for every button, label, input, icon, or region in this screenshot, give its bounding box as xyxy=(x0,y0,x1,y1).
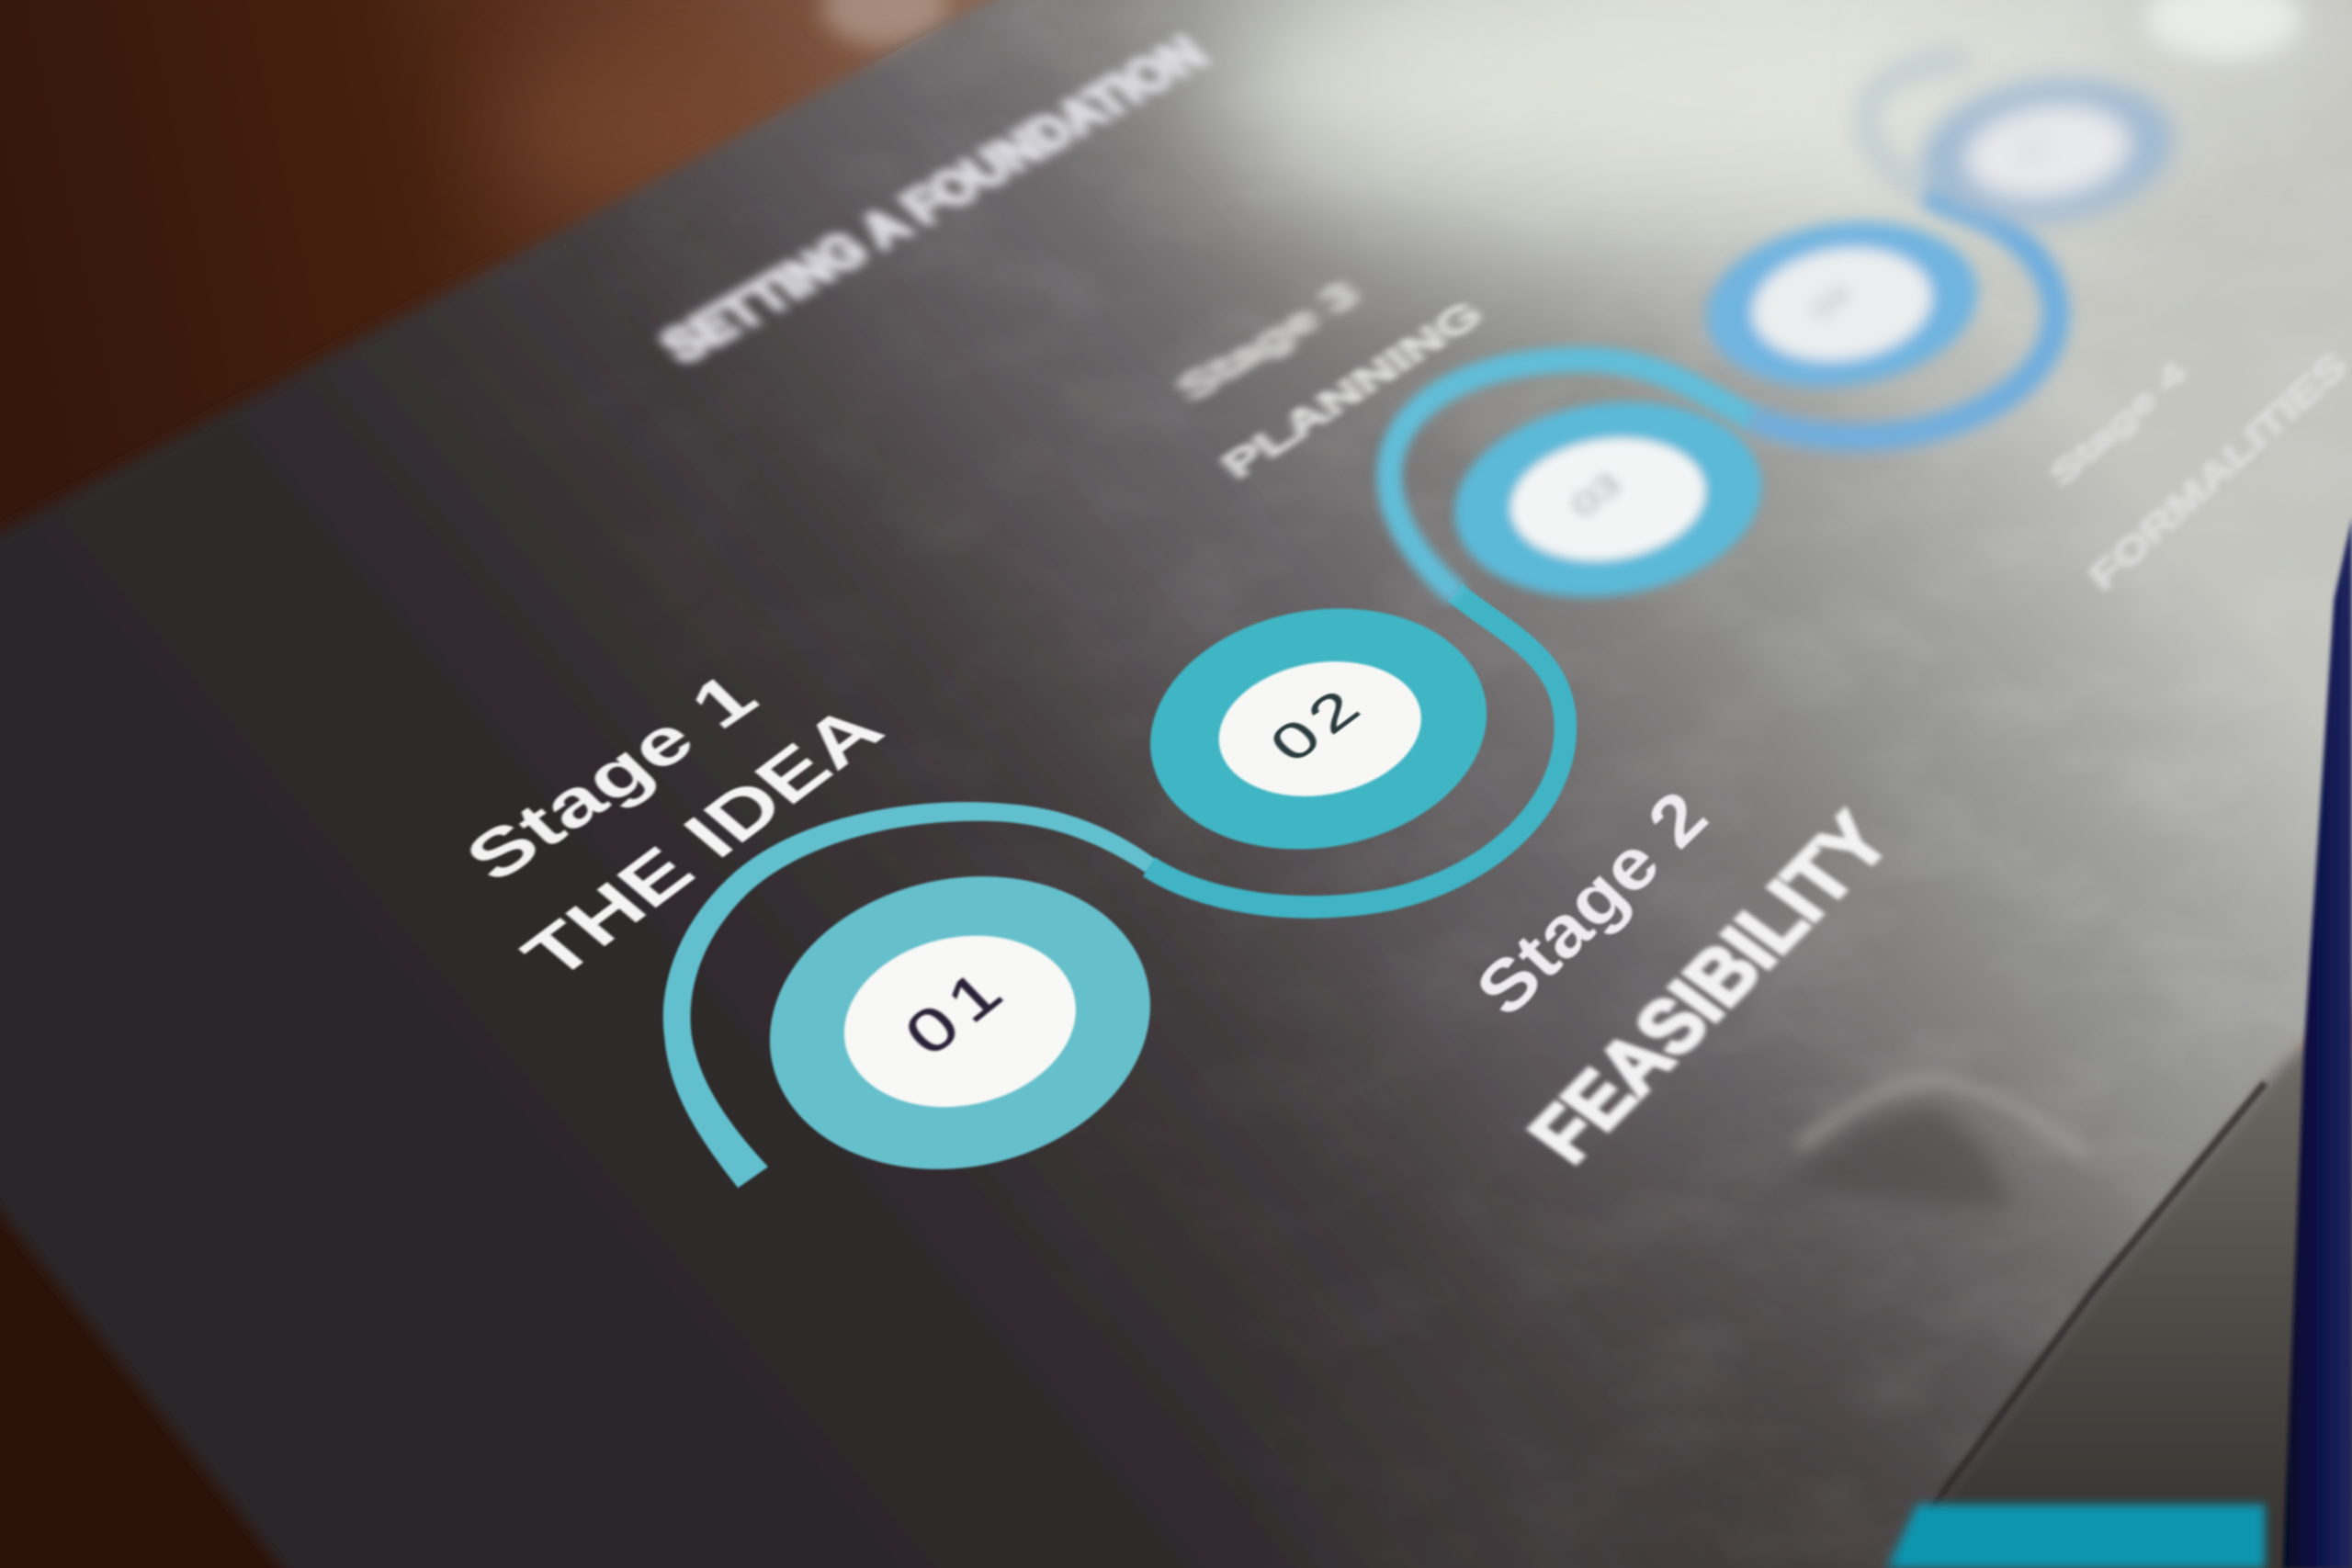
path segment: stage 5 arc xyxy=(1866,60,1965,192)
label: FORMALITIES: FORMALITIES xyxy=(2081,344,2352,598)
path segment: stage 1 tapered arc xyxy=(663,802,1158,1188)
label: FEASIBILITY: FEASIBILITY xyxy=(1511,798,1907,1178)
title: SETTING A FOUNDATION xyxy=(649,26,1218,372)
connector path xyxy=(663,60,2056,1188)
label: Stage 3: Stage 3 xyxy=(1168,275,1368,408)
under-sheet at lower right xyxy=(1845,1050,2352,1568)
path segment: stage 4 arc xyxy=(1752,192,2056,437)
label: Stage 1: Stage 1 xyxy=(449,659,773,896)
stage 02 marker xyxy=(1131,582,1506,875)
stage 02 marker: 02 xyxy=(1257,675,1377,773)
stage 01 marker: 01 xyxy=(891,953,1023,1068)
paper crease xyxy=(1785,1080,2085,1214)
stage 06 marker xyxy=(2145,0,2301,60)
teal block at bottom xyxy=(1887,1505,2265,1568)
blue pen xyxy=(2283,517,2352,1568)
path segment: stage 3 arc xyxy=(1389,360,1755,595)
stage 05 marker xyxy=(1911,64,2184,239)
stage 03 marker: 03 xyxy=(1564,467,1629,525)
stage 04 marker: 04 xyxy=(1805,279,1857,326)
label: PLANNING: PLANNING xyxy=(1213,293,1492,486)
label: Stage 4: Stage 4 xyxy=(2043,355,2193,493)
label: Stage 2: Stage 2 xyxy=(1460,776,1723,1031)
label: THE IDEA: THE IDEA xyxy=(504,690,899,993)
stage 01 marker xyxy=(742,842,1178,1203)
paper edge shadow xyxy=(1893,1083,2265,1568)
stage 04 marker xyxy=(1696,205,1988,403)
stage 05 marker: 05 xyxy=(2012,130,2055,169)
path segment: stage 2 arc xyxy=(1149,592,1566,907)
stage 03 marker xyxy=(1442,383,1774,616)
